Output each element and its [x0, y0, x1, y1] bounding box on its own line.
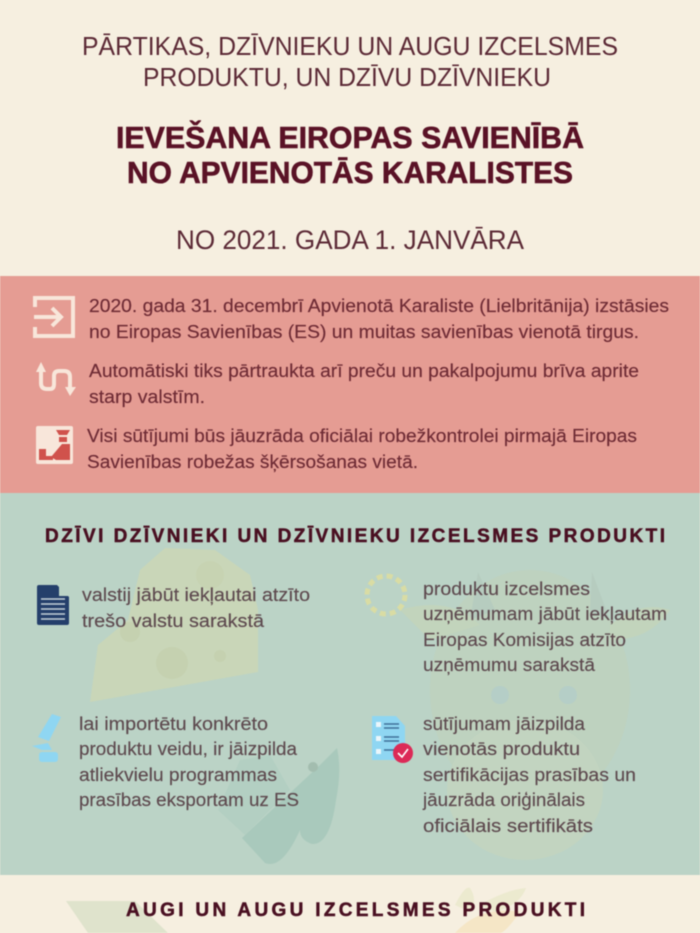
- heading: AUGI UN AUGU IZCELSMES PRODUKTI: [126, 900, 585, 921]
- header panel: [0, 0, 700, 276]
- icon: document: [37, 585, 69, 625]
- background illustration: cheese: [90, 548, 258, 702]
- text: establishment list: Eiropas Komisijas atzīto: [423, 630, 626, 650]
- subtitle: PĀRTIKAS, DZĪVNIEKU UN AUGU IZCELSMES: [82, 31, 618, 61]
- text: free movement ends: Automātiski tiks pārtraukta arī preču un pakalpojumu brīva aprite: [89, 361, 639, 381]
- text: establishment list: uzņēmumam jābūt iekļautam: [423, 604, 667, 624]
- text: leaving the EU: no Eiropas Savienības (ES) un muitas savienības vienotā tirgus.: [89, 322, 639, 342]
- panel: plants and plant products: [0, 875, 700, 933]
- icon: certificate checklist: [372, 716, 413, 763]
- text: certification: sūtījumam jāizpilda: [423, 714, 586, 734]
- title: [116, 119, 584, 190]
- text: certification: oficiālais sertifikāts: [423, 816, 593, 836]
- icon: exit arrow: [34, 298, 73, 336]
- text: third country list: [82, 585, 310, 631]
- background illustration: leaves: [66, 888, 526, 933]
- background illustration: cow: [400, 570, 670, 860]
- text: border control: Visi sūtījumi būs jāuzrāda oficiālai robežkontrolei pirmajā Eiropas: [87, 426, 637, 446]
- text: certification: jāuzrāda oriģinālais: [422, 790, 585, 810]
- subtitle: [82, 31, 618, 92]
- subtitle: PRODUKTU, UN DZĪVU DZĪVNIEKU: [143, 62, 551, 92]
- text: border control: Savienības robežas šķērsošanas vietā.: [87, 452, 418, 472]
- text: border control: [87, 426, 637, 472]
- date line: NO 2021. GADA 1. JANVĀRA: [176, 225, 524, 255]
- title: IEVEŠANA EIROPAS SAVIENĪBĀ: [116, 119, 584, 155]
- icon: microscope: [32, 714, 61, 762]
- text: third country list: trešo valstu sarakstā: [82, 611, 265, 631]
- background illustration: mouse: [218, 748, 339, 864]
- text: establishment list: uzņēmumu sarakstā: [423, 655, 596, 675]
- icon: EU stars ring: [367, 576, 405, 614]
- text: certification: vienotās produktu: [423, 739, 580, 759]
- text: certification: sertifikācijas prasības un: [423, 765, 636, 785]
- panel: Brexit notices: [0, 276, 700, 493]
- panel: live animals and animal products: [0, 493, 700, 875]
- title: NO APVIENOTĀS KARALISTES: [127, 155, 573, 190]
- text: third country list: valstij jābūt iekļautai atzīto: [82, 585, 310, 605]
- text: establishment list: produktu izcelsmes: [423, 579, 590, 599]
- text: residue programme: produktu veidu, ir jāizpilda: [79, 739, 298, 759]
- text: free movement ends: starp valstīm.: [89, 387, 205, 407]
- text: certification: [422, 714, 636, 836]
- icon: border officer: [36, 426, 73, 464]
- icon: flow arrows: [36, 362, 76, 396]
- text: residue programme: prasības eksportam uz ES: [79, 790, 299, 810]
- text: establishment list: [423, 579, 667, 675]
- text: residue programme: [79, 714, 299, 810]
- text: free movement ends: [89, 361, 639, 407]
- text: leaving the EU: [89, 296, 669, 342]
- text: residue programme: atliekvielu programmas: [79, 765, 277, 785]
- text: residue programme: lai importētu konkrēto: [79, 714, 268, 734]
- text: leaving the EU: 2020. gada 31. decembrī Apvienotā Karaliste (Lielbritānija) izstāsies: [89, 296, 669, 316]
- heading: DZĪVI DZĪVNIEKI UN DZĪVNIEKU IZCELSMES PRODUKTI: [45, 526, 665, 547]
